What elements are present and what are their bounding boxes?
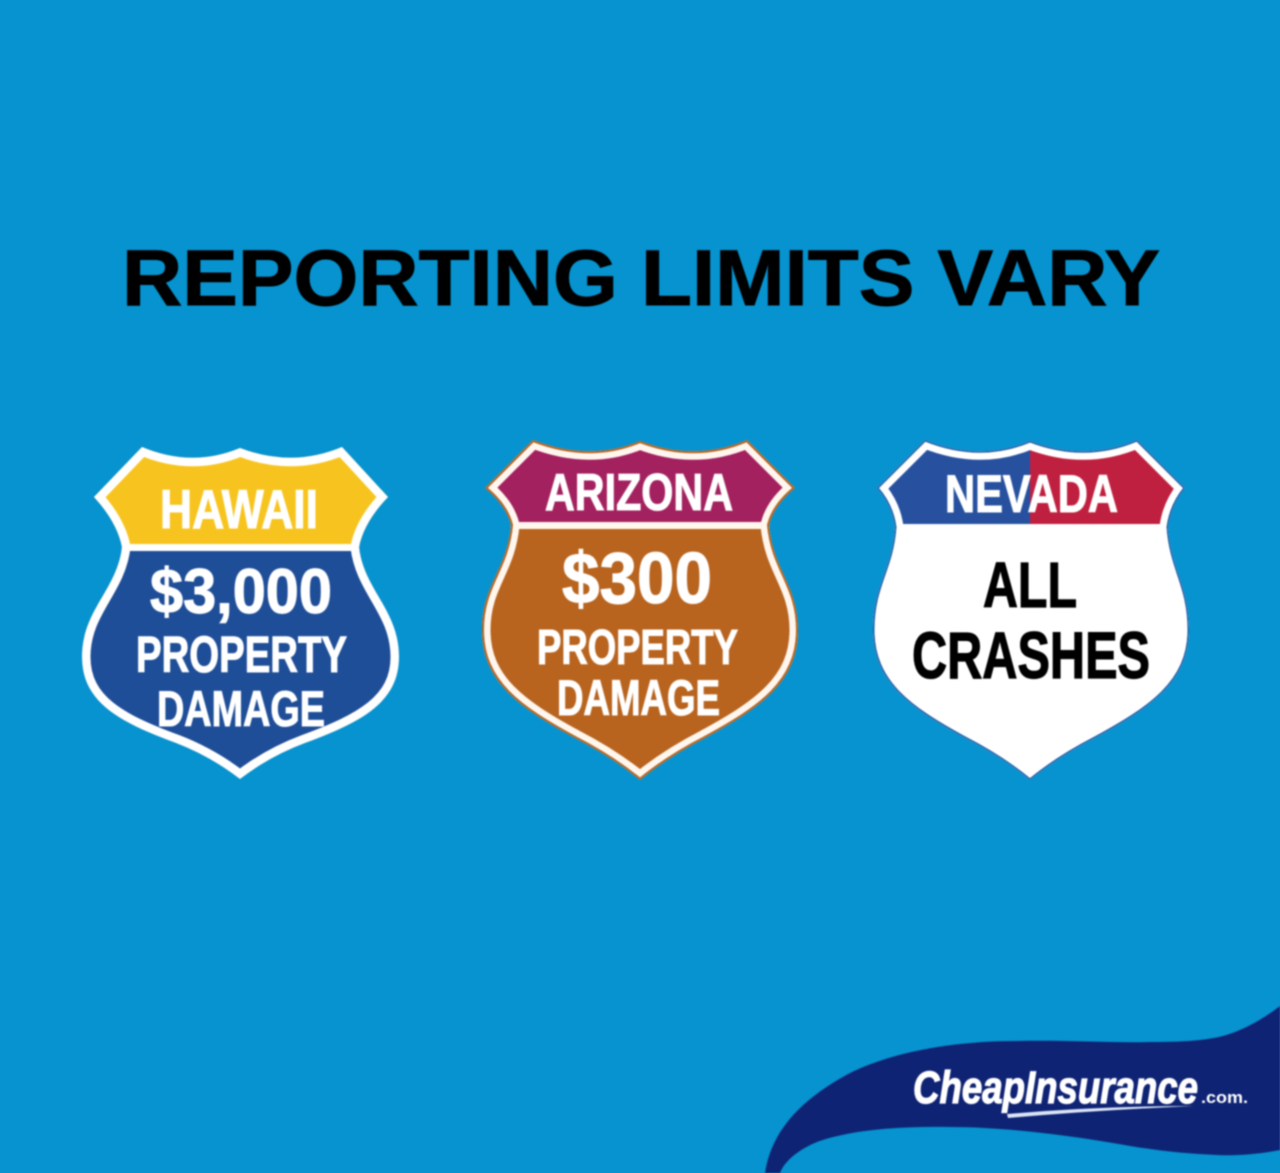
navy swoosh [765,1006,1280,1173]
logo underline [1007,1106,1194,1118]
logo wordmark: CheapInsurance [913,1062,1198,1113]
shield body: Hawaii [70,440,410,785]
label: crashes: CRASHES [912,618,1150,692]
panel: Hawaii shield [70,440,410,785]
label: damage: DAMAGE [157,681,325,737]
panel: Nevada shield [860,435,1200,785]
infographic canvas [80,248,1280,1173]
shield body: Nevada [860,435,1200,785]
label: property: PROPERTY [537,621,738,675]
logo suffix: .com. [1201,1088,1248,1107]
amount: $300: $300 [562,539,712,619]
panel: Arizona shield [470,435,810,785]
state name: Nevada: NEVADA [945,465,1118,524]
amount: $3,000: $3,000 [150,557,332,627]
state name: Arizona: ARIZONA [545,464,733,522]
logo [913,1062,1248,1118]
label: all: ALL [983,549,1077,621]
title: REPORTING LIMITS VARY [122,233,1160,322]
shield body: Arizona [470,435,810,785]
label: damage: DAMAGE [557,670,720,726]
label: property: PROPERTY [136,626,347,683]
state name: Hawaii: HAWAII [160,478,318,540]
